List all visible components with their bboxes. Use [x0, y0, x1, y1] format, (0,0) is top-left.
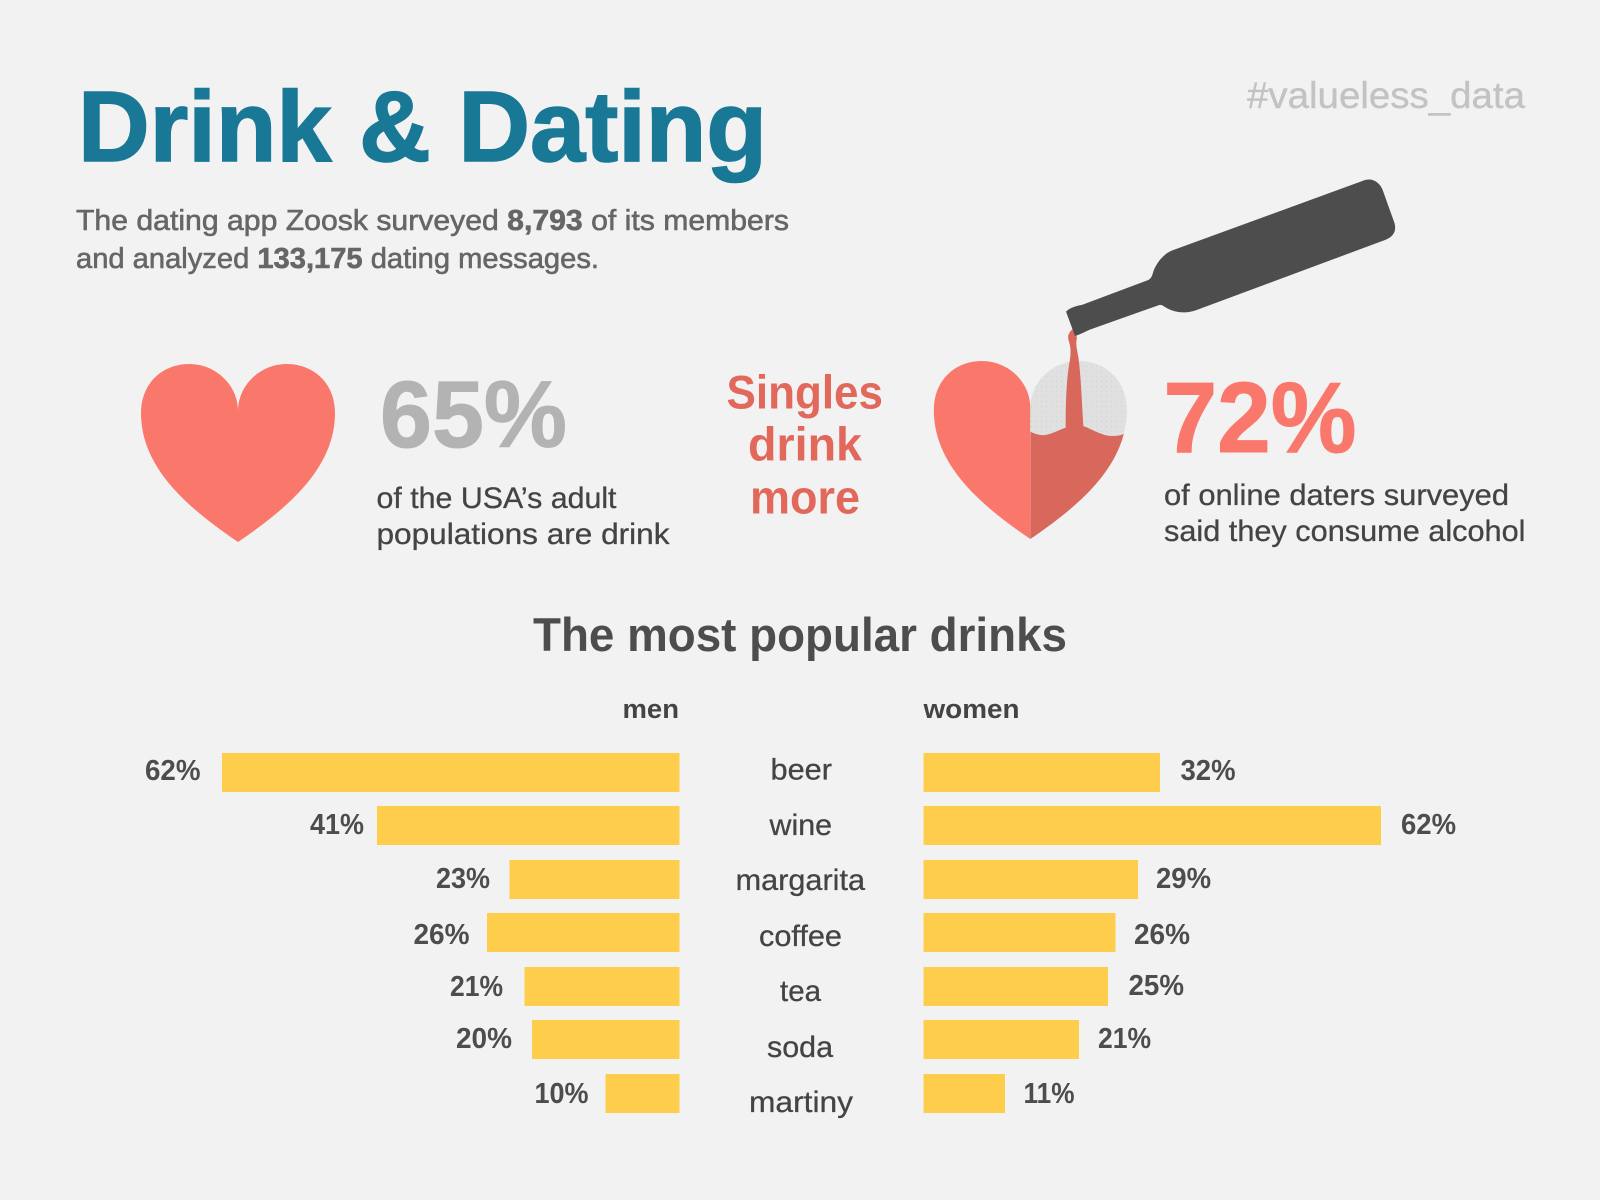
callout: singles drink more: [726, 366, 883, 524]
bar chart: men: 62%: [145, 755, 201, 787]
bar chart: women: 26%: [1134, 919, 1190, 951]
drink category labels: margarita: [736, 864, 865, 897]
stat: 72 percent: said they consume alcohol: [1164, 515, 1526, 548]
bar chart: men: 21%: [450, 971, 503, 1003]
bar chart: men: 10%: [534, 1078, 589, 1110]
bar chart: men: [145, 753, 680, 1113]
drink category labels: coffee: [759, 920, 842, 953]
bar chart: women: 21%: [1098, 1023, 1151, 1055]
column heading: women: women: [922, 694, 1020, 724]
drink category labels: tea: [780, 975, 821, 1008]
stat: 65 percent: [376, 362, 671, 551]
bar chart: men: 26%: [414, 919, 470, 951]
column heading: men: men: [622, 694, 679, 724]
bar chart: women: 25%: [1128, 970, 1184, 1002]
icon: wine bottle: [1066, 180, 1395, 336]
bar chart: women: 29%: [1156, 863, 1211, 895]
stat: 65 percent: 65%: [380, 362, 567, 468]
bar chart: women: 32%: [1180, 755, 1236, 787]
bar chart: men: 20%: [456, 1023, 512, 1055]
stat: 65 percent: populations are drink: [376, 518, 671, 551]
stat: 72 percent: of online daters surveyed: [1164, 479, 1509, 512]
stat: 72 percent: 72%: [1164, 362, 1356, 474]
stat: 72 percent: [1164, 362, 1526, 548]
stat: 65 percent: of the USA’s adult: [376, 482, 617, 515]
intro text: and analyzed 133,175 dating messages.: [76, 243, 599, 275]
bar chart: women: [924, 753, 1456, 1113]
icon: heart: [141, 364, 335, 542]
drink category labels: [736, 754, 865, 1119]
hashtag: #valueless_data: [1247, 75, 1525, 116]
title: Drink & Dating: [78, 71, 767, 183]
intro text: [76, 205, 789, 275]
drink category labels: soda: [767, 1031, 833, 1064]
bar chart: men: 23%: [436, 863, 490, 895]
icon: heart filling with wine from bottle: [934, 180, 1395, 545]
callout: singles drink more: drink: [748, 418, 863, 470]
intro text: The dating app Zoosk surveyed 8,793 of its members: [76, 205, 789, 237]
infographic canvas: [76, 80, 1526, 1118]
bar chart: women: 62%: [1401, 809, 1456, 841]
drink category labels: wine: [768, 809, 832, 842]
heading: most popular drinks: The most popular drinks: [533, 608, 1067, 661]
bar chart: women: 11%: [1024, 1078, 1075, 1110]
bar chart: men: 41%: [310, 809, 364, 841]
drink category labels: beer: [770, 754, 832, 786]
drink category labels: martiny: [749, 1086, 853, 1119]
callout: singles drink more: more: [750, 470, 860, 524]
callout: singles drink more: Singles: [726, 366, 883, 418]
